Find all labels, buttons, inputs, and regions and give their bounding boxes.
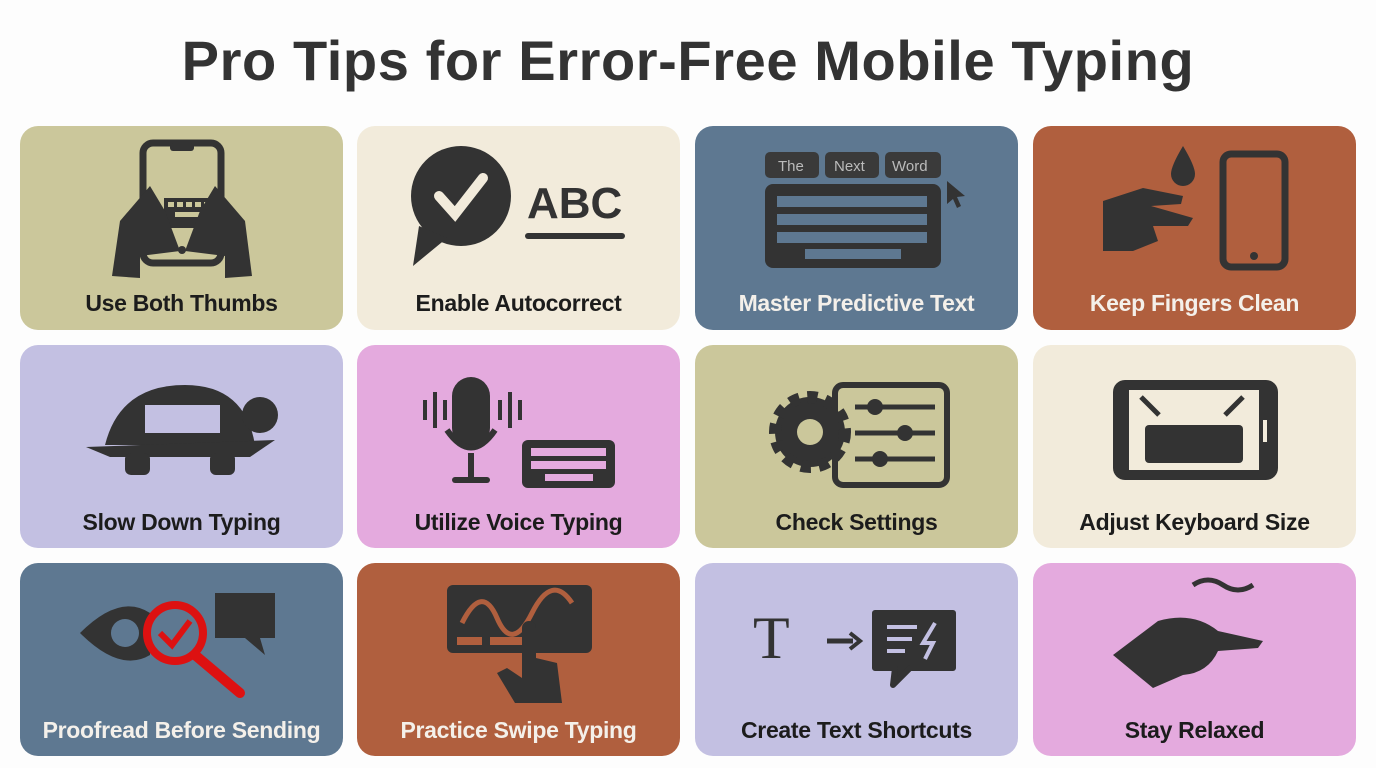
panel: practice swipe typing bbox=[357, 563, 680, 756]
panel: utilize voice typing bbox=[357, 345, 680, 548]
panel: enable autocorrect: Enable Autocorrect bbox=[416, 290, 621, 316]
panel: keep fingers clean: Keep Fingers Clean bbox=[1090, 290, 1299, 316]
panel: stay relaxed bbox=[1033, 563, 1356, 756]
title: Pro Tips for Error-Free Mobile Typing bbox=[182, 29, 1194, 92]
panel: proofread before sending bbox=[20, 563, 343, 756]
panel: adjust keyboard size bbox=[1033, 345, 1356, 548]
icon: check bubble and ABC bbox=[411, 146, 625, 266]
icon: hands holding phone bbox=[112, 140, 252, 278]
icon: keyboard with suggestions: Word bbox=[892, 158, 928, 175]
panel: master predictive text: Master Predictive Text bbox=[739, 290, 974, 316]
panel: slow down typing: Slow Down Typing bbox=[83, 509, 280, 535]
panel: create text shortcuts: Create Text Shortcuts bbox=[741, 717, 972, 743]
panel: check settings: Check Settings bbox=[776, 509, 937, 535]
panel: proofread before sending: Proofread Before Sending bbox=[43, 717, 320, 743]
panel: use both thumbs bbox=[20, 126, 343, 330]
icon: eye, magnifier, message bbox=[80, 593, 275, 698]
icon: check bubble and ABC: ABC bbox=[527, 179, 622, 228]
icon: keyboard with suggestions: The bbox=[778, 158, 804, 175]
panel: create text shortcuts bbox=[695, 563, 1018, 756]
panel: keep fingers clean bbox=[1033, 126, 1356, 330]
icon: keyboard with swipe and finger bbox=[447, 585, 592, 703]
panel: slow down typing bbox=[20, 345, 343, 548]
panel: use both thumbs: Use Both Thumbs bbox=[85, 290, 278, 316]
icon: T arrow message: T bbox=[753, 605, 790, 671]
panel: enable autocorrect bbox=[357, 126, 680, 330]
icon: T arrow message bbox=[753, 605, 956, 688]
icon: keyboard with suggestions: Next bbox=[834, 158, 866, 175]
panel: stay relaxed: Stay Relaxed bbox=[1125, 717, 1264, 743]
icon: relaxed hand with wave bbox=[1113, 578, 1263, 688]
icon: gear and sliders bbox=[769, 382, 950, 488]
icon: microphone and keyboard bbox=[423, 377, 615, 488]
panel: utilize voice typing: Utilize Voice Typing bbox=[415, 509, 622, 535]
panel: practice swipe typing: Practice Swipe Typing bbox=[400, 717, 637, 743]
icon: keyboard with suggestions bbox=[765, 152, 965, 268]
panel: check settings bbox=[695, 345, 1018, 548]
icon: hand, drop, phone bbox=[1103, 146, 1288, 270]
panel: adjust keyboard size: Adjust Keyboard Size bbox=[1079, 509, 1310, 535]
panel: master predictive text bbox=[695, 126, 1018, 330]
icon: landscape phone with keyboard bbox=[1113, 380, 1278, 480]
icon: turtle with keyboard bbox=[86, 385, 278, 475]
